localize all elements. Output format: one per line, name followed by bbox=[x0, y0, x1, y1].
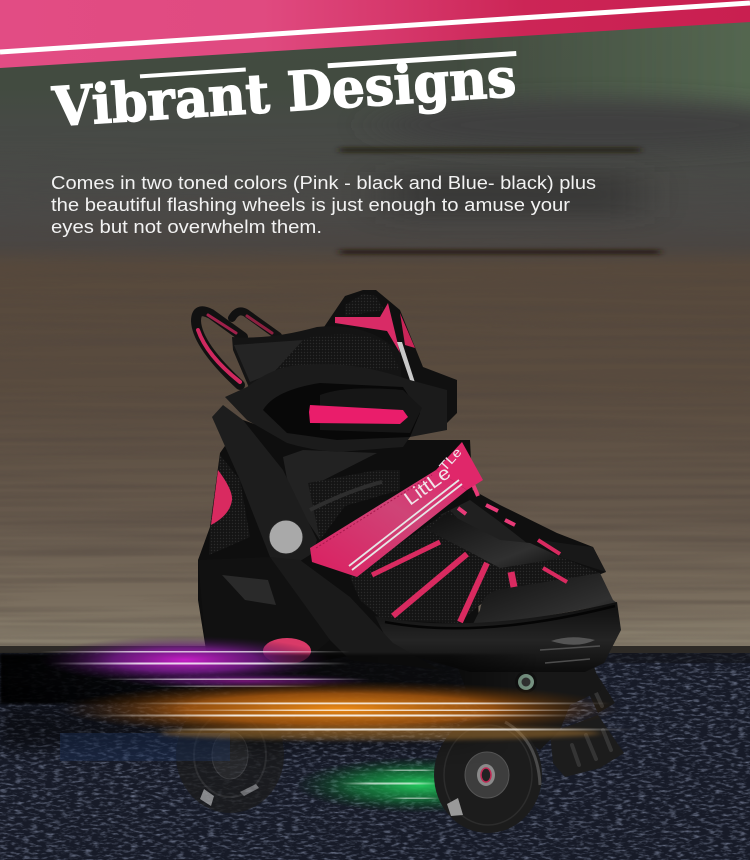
pink Velcro strap bbox=[310, 442, 483, 577]
blue light trail bbox=[60, 733, 230, 761]
pink heel patch bbox=[211, 470, 232, 525]
ankle buckle strap bbox=[225, 364, 447, 452]
rear chassis bbox=[205, 640, 470, 735]
cuff bbox=[232, 326, 402, 390]
pink Velcro strap: TLe bbox=[436, 445, 465, 474]
green light trail bbox=[295, 757, 545, 813]
background: asphalt ground bbox=[0, 653, 750, 860]
body text: the beautiful flashing wheels is just enough to amuse your bbox=[51, 194, 570, 215]
orange light trail bbox=[60, 681, 640, 740]
inner side panel bbox=[283, 450, 400, 540]
skate boot bbox=[196, 290, 621, 672]
dark motion band bbox=[0, 654, 750, 704]
pink buckle lever bbox=[309, 405, 408, 424]
tongue bbox=[322, 290, 457, 430]
faded pink oval bbox=[263, 638, 311, 664]
axle bolt bbox=[515, 671, 537, 693]
toe cap bbox=[470, 573, 617, 630]
front chassis bbox=[455, 655, 602, 750]
title: Vibrant Designs bbox=[50, 45, 518, 139]
body text bbox=[51, 172, 596, 237]
front wheel bbox=[434, 717, 542, 833]
front upper laces bbox=[440, 482, 606, 590]
toe mesh bbox=[350, 510, 600, 623]
brake stopper bbox=[550, 668, 624, 777]
top pink banner bbox=[0, 0, 750, 68]
ankle body bbox=[198, 420, 480, 665]
rear wheel bbox=[176, 697, 284, 813]
sole bbox=[375, 602, 621, 672]
background: blurred motion road bbox=[0, 22, 750, 653]
silver rivet bbox=[269, 520, 303, 554]
pink Velcro strap: LittLe bbox=[401, 462, 455, 510]
rear loop straps bbox=[196, 311, 278, 385]
side frame bbox=[198, 405, 440, 670]
pink accent lines bbox=[372, 540, 567, 622]
dark haze over road bbox=[0, 704, 700, 749]
rear mesh panel bbox=[209, 455, 250, 555]
purple light trail bbox=[40, 636, 375, 689]
vamp leather bbox=[427, 513, 563, 568]
body text: eyes but not overwhelm them. bbox=[51, 216, 322, 237]
body text: Comes in two toned colors (Pink - black and Blue- black) plus bbox=[51, 172, 596, 193]
upper toe bbox=[540, 540, 606, 572]
